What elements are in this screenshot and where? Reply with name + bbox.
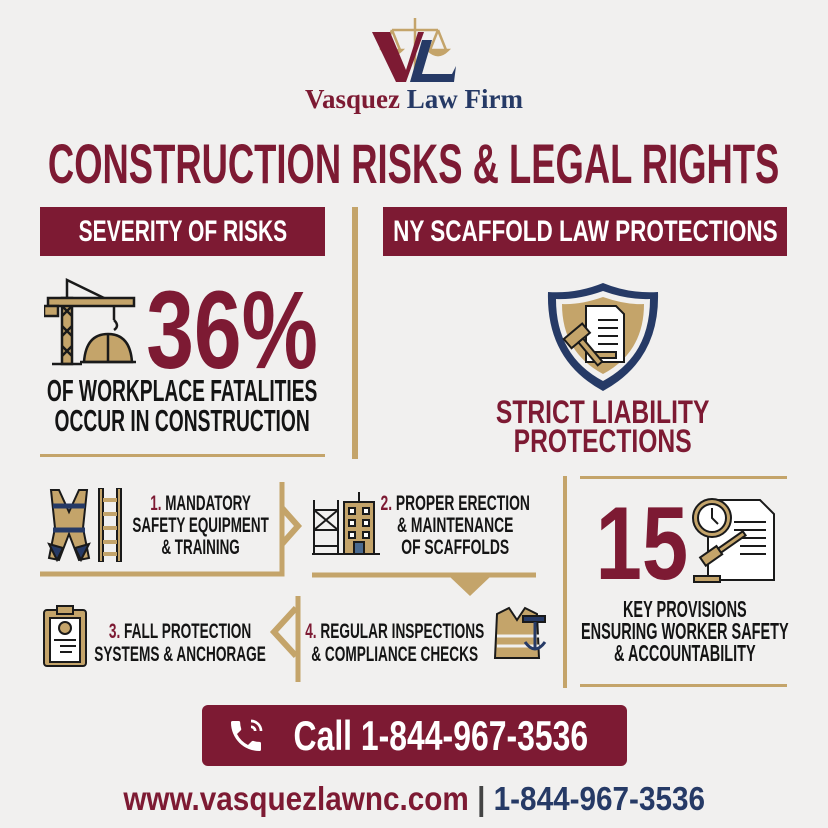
step 3 [43,605,266,667]
text: strict liability: STRICT LIABILITY [496,394,710,430]
call button: Call 1-844-967-3536 [293,712,588,758]
header: NY scaffold law [383,207,787,256]
text: strict liability: PROTECTIONS [514,423,692,459]
text: fatalities: OCCUR IN CONSTRUCTION [55,403,310,438]
text: mandatory safety equipment [132,492,269,559]
title: CONSTRUCTION RISKS & LEGAL RIGHTS [48,132,780,195]
firm name: Vasquez Law Firm [305,84,523,114]
call button [202,705,627,766]
text: key provisions: & ACCOUNTABILITY [614,640,756,666]
panel: 15 key provisions [563,476,789,688]
stat: 15: 15 [596,486,688,602]
header: severity of risks [40,207,325,256]
step 4 [305,606,546,666]
header: NY scaffold law: NY SCAFFOLD LAW PROTECTIONS [393,214,777,248]
text: fall protection: 3. FALL PROTECTION [109,620,251,643]
text: mandatory safety equipment: SAFETY EQUIPMENT [133,514,269,537]
text: regular inspections [305,620,484,666]
text: proper erection: 2. PROPER ERECTION [380,492,530,515]
icon: clipboard [43,605,87,667]
icon: scales [382,18,448,72]
step 1 [47,488,269,562]
text: fall protection: SYSTEMS & ANCHORAGE [94,643,266,666]
footer contact: www.vasquezlawnc.com | 1-844-967-3536 [123,780,705,817]
arrow: step4 to step3 [270,596,300,682]
header: severity of risks: SEVERITY OF RISKS [78,214,287,248]
icon: vest and anchor [494,606,546,659]
text: fatalities [47,373,318,438]
icon: document with clock and gavel [692,498,775,583]
text: fall protection [94,620,266,666]
icon: scaffold and building [312,492,380,555]
text: mandatory safety equipment: & TRAINING [162,536,240,559]
text: proper erection [380,492,530,559]
step 2 [312,492,530,559]
icon: phone [231,720,262,751]
text: regular inspections: & COMPLIANCE CHECKS [312,643,478,666]
text: key provisions [581,596,789,666]
arrow: step1 to step2 [40,482,302,576]
text: fatalities: OF WORKPLACE FATALITIES [47,373,318,408]
text: mandatory safety equipment: 1. MANDATORY [151,492,251,515]
text: strict liability [496,394,710,459]
stat: 36%: 36% [147,269,318,392]
text: regular inspections: 4. REGULAR INSPECTIONS [306,620,484,643]
icon: shield with gavel [548,283,658,391]
text: proper erection: & MAINTENANCE [397,514,513,537]
text: key provisions: ENSURING WORKER SAFETY [581,618,789,644]
icon: harness and ladder [47,488,122,562]
icon: crane and hard hat [44,278,136,366]
text: key provisions: KEY PROVISIONS [623,596,747,622]
text: proper erection: OF SCAFFOLDS [401,536,509,559]
arrow: step2 to step4 [312,572,536,596]
logo [372,18,456,82]
